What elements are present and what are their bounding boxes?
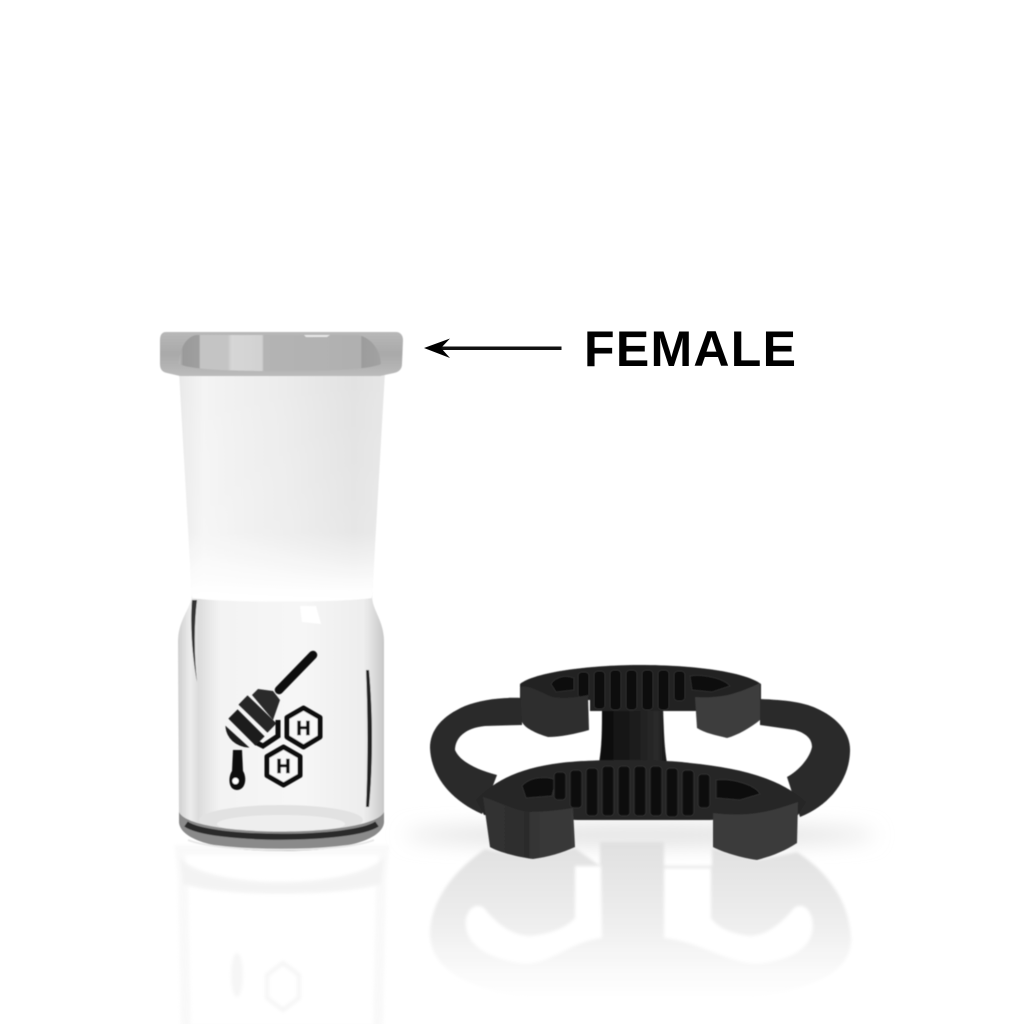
dipper flange xyxy=(252,689,280,720)
arrow pointing to collar xyxy=(424,338,562,358)
lower teeth xyxy=(522,766,760,817)
upper right block xyxy=(695,683,760,738)
label: FEMALE: FEMALE xyxy=(584,321,796,377)
upper teeth xyxy=(551,670,730,710)
honeycomb hexagon upper: H xyxy=(296,718,311,740)
frosted joint xyxy=(179,372,385,602)
black clip xyxy=(430,665,850,860)
lower arc xyxy=(476,760,806,820)
upper arc xyxy=(520,665,761,711)
collar rim xyxy=(160,332,403,376)
lower left block xyxy=(483,797,575,859)
lower right block xyxy=(713,802,798,860)
glass reflection xyxy=(180,850,384,1024)
honeycomb hexagon lower: H xyxy=(276,756,291,778)
partial hexagon behind dipper xyxy=(255,720,278,746)
honey dipper logo xyxy=(226,655,320,790)
side arms xyxy=(430,698,850,817)
dipper head bands xyxy=(226,700,272,747)
center post xyxy=(598,708,668,768)
dipper handle xyxy=(279,655,313,690)
glass joint xyxy=(160,332,403,851)
clear glass base xyxy=(178,596,384,851)
clip shadow and floor reflection xyxy=(405,824,875,1000)
honey drip xyxy=(229,750,245,790)
upper left block xyxy=(520,686,589,737)
